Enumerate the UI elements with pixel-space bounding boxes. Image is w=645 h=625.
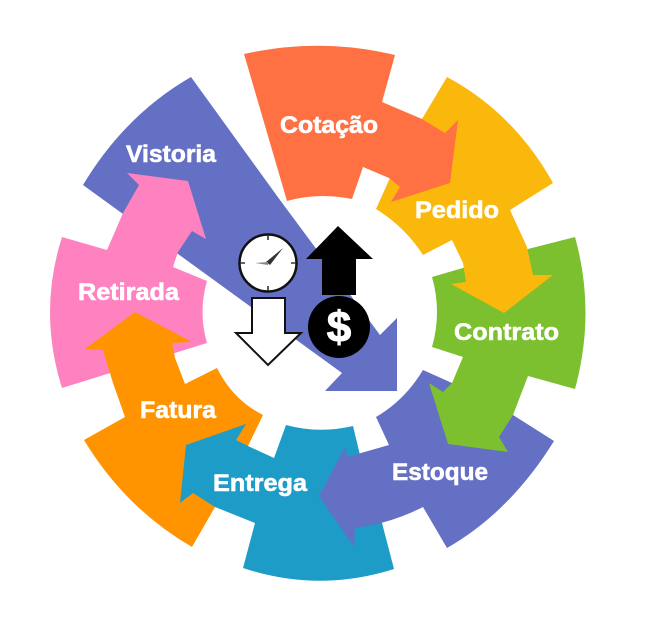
segment: Contrato <box>429 237 586 452</box>
segment: Entrega <box>180 424 394 581</box>
label: Retirada: Retirada <box>78 279 180 306</box>
label: Entrega: Entrega <box>213 470 308 497</box>
segment: Cotação <box>244 46 458 202</box>
label: Contrato: Contrato <box>454 319 559 346</box>
segment: Estoque <box>319 370 554 548</box>
icon: up arrow <box>306 226 373 295</box>
label: Estoque: Estoque <box>392 459 488 486</box>
segment: Vistoria <box>83 77 397 391</box>
label: Pedido: Pedido <box>415 197 499 224</box>
segment: Retirada <box>50 173 207 388</box>
segment: Fatura <box>84 312 263 547</box>
icon: dollar coin: $ <box>327 303 351 352</box>
label: Cotação: Cotação <box>280 112 378 139</box>
icon: clock <box>240 234 296 292</box>
segment: Pedido <box>376 77 553 313</box>
label: Vistoria: Vistoria <box>126 141 217 168</box>
label: Fatura: Fatura <box>140 397 217 424</box>
icon: dollar coin <box>308 296 370 358</box>
icon: down arrow <box>236 298 301 365</box>
